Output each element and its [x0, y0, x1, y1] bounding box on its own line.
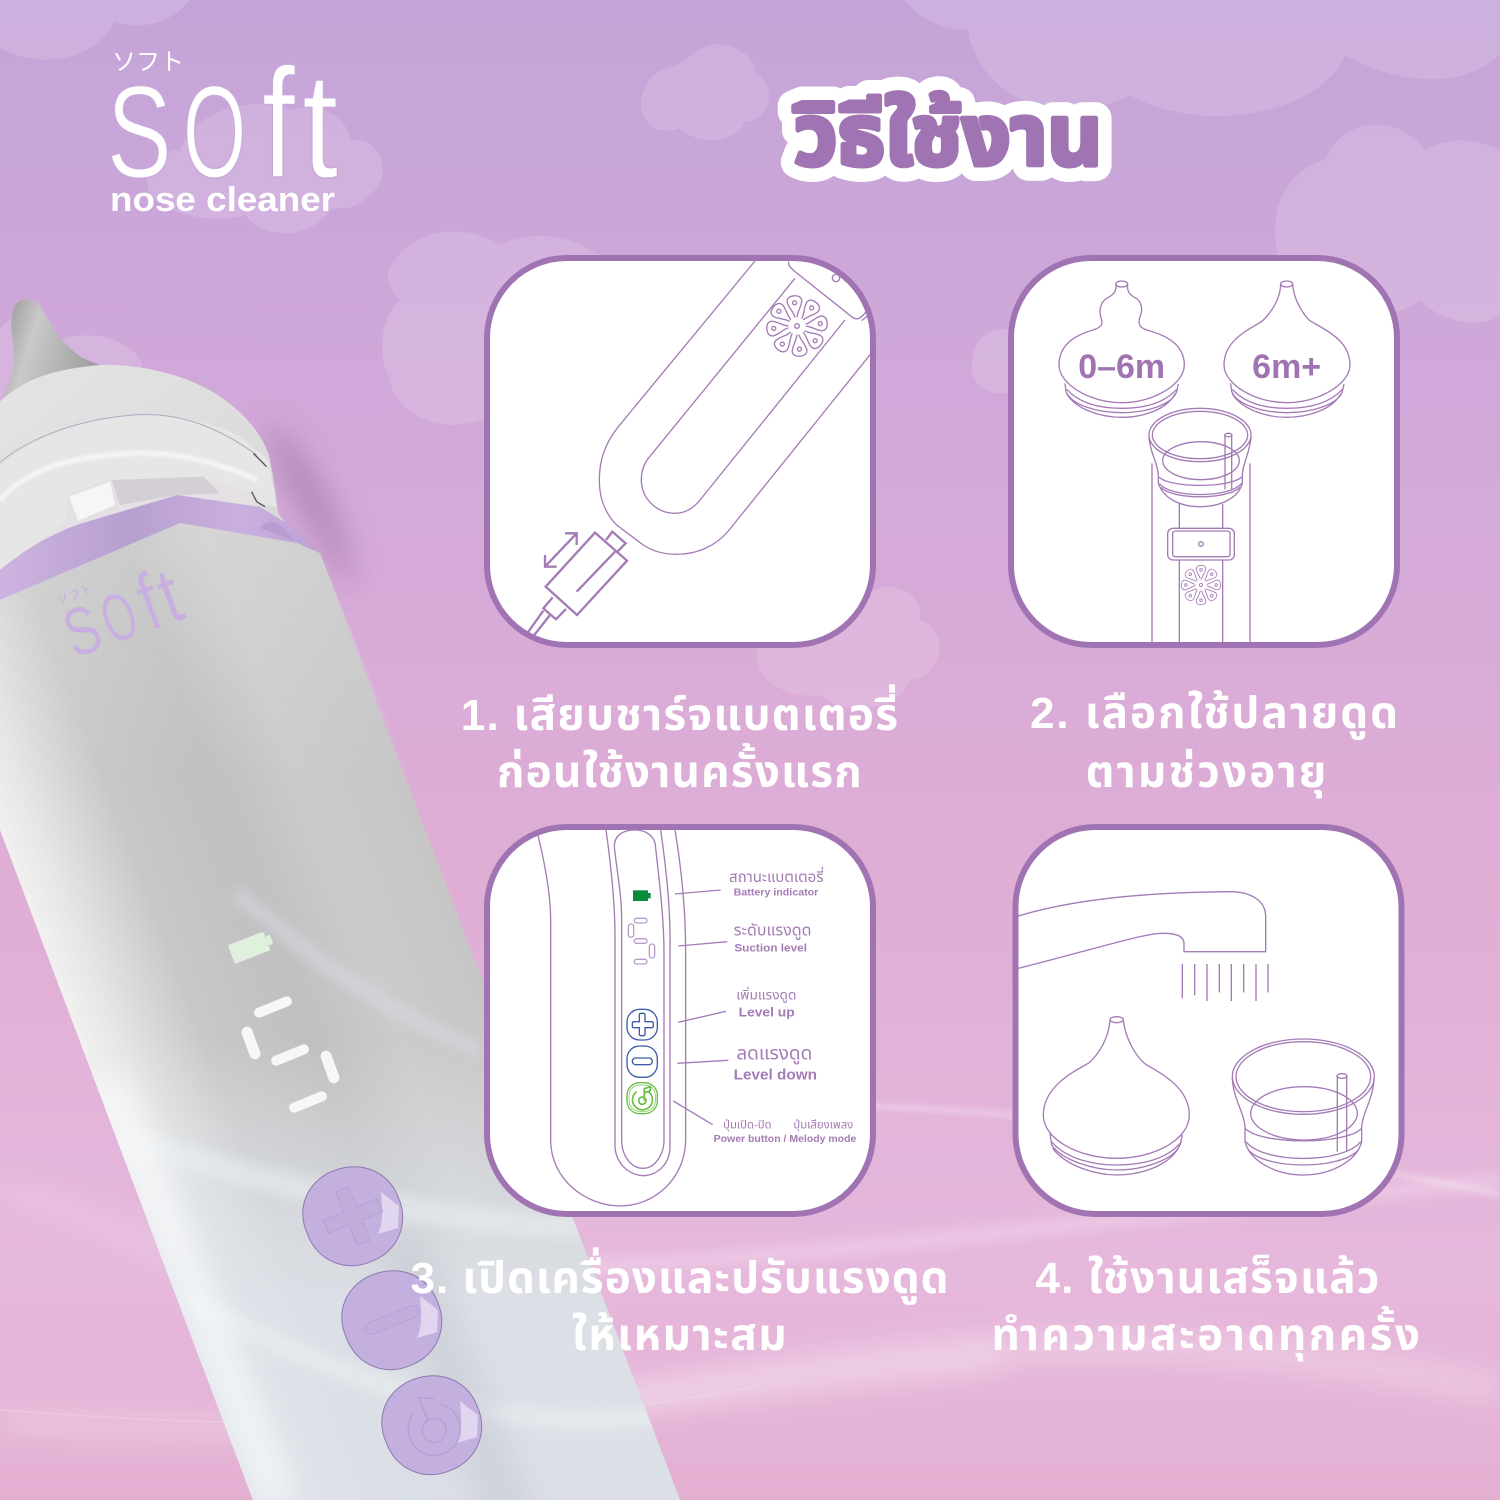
- caption 2: [1030, 689, 1400, 799]
- label level up: เพิ่มแรงดูด: [736, 986, 796, 1004]
- device outlines: [537, 830, 686, 1206]
- logo: [107, 37, 338, 219]
- device body: [0, 523, 680, 1500]
- label level down: [734, 1049, 816, 1080]
- label level up: Level up: [739, 1004, 795, 1019]
- insertion arrow: [545, 533, 577, 567]
- flower emblem: [1181, 565, 1221, 605]
- caption 4: 4. ใช้งานเสร็จแล้ว: [1035, 1254, 1381, 1303]
- panel: step 4 cleaning: [1016, 827, 1402, 1214]
- caption 2: ตามช่วงอายุ: [1086, 748, 1328, 799]
- caption 1: [461, 684, 899, 797]
- label power melody: ปุ่มเสียงเพลง: [793, 1118, 853, 1131]
- caption 4: [991, 1254, 1423, 1362]
- panel: step 1 charging: [487, 258, 873, 645]
- label suction: [734, 923, 810, 952]
- label power melody: [714, 1118, 857, 1145]
- caption 1: 1. เสียบชาร์จแบตเตอรี่: [461, 684, 899, 740]
- device shadow: [262, 420, 358, 590]
- faucet: [1018, 892, 1266, 968]
- flower emblem: [766, 295, 828, 357]
- device collar: [788, 262, 871, 321]
- battery icon: [633, 890, 651, 901]
- label suction: ระดับแรงดูด: [734, 923, 812, 940]
- background clouds: [0, 0, 1500, 709]
- tip 0-6m: [1059, 281, 1184, 417]
- device dome head: [0, 365, 293, 600]
- suction level icon: [628, 918, 655, 964]
- device inner outline: [641, 278, 845, 513]
- power melody button icon: [627, 1083, 657, 1114]
- device body lines: [1152, 463, 1250, 642]
- device logo: t: [146, 552, 193, 640]
- label battery: [729, 866, 824, 899]
- logo wordmark: f: [262, 37, 295, 211]
- caption 3: ให้เหมาะสม: [572, 1311, 788, 1360]
- title: วิธีใช้งาน: [793, 89, 1102, 184]
- base cup: [1232, 1039, 1374, 1175]
- tip 6m+: [1224, 281, 1350, 417]
- water streams: [1182, 964, 1268, 1001]
- device logo: [50, 550, 194, 675]
- background light wisps: [0, 1105, 1500, 1428]
- device logo: ソフト: [54, 579, 95, 609]
- device nipple tip: [0, 300, 100, 397]
- device battery light: [228, 930, 275, 964]
- panel: step 2 tips: [1011, 258, 1397, 645]
- label power melody: Power button / Melody mode: [714, 1134, 857, 1145]
- tip 0-6m: 0–6m: [1078, 348, 1165, 386]
- device logo: O: [91, 577, 148, 660]
- base cup: [1149, 408, 1251, 507]
- logo wordmark: O: [183, 59, 246, 206]
- device body haze: [105, 890, 680, 1500]
- label battery: Battery indicator: [734, 888, 818, 899]
- caption 2: 2. เลือกใช้ปลายดูด: [1030, 689, 1400, 740]
- product: nose cleaner device: [0, 300, 700, 1500]
- caption 3: [410, 1247, 950, 1360]
- device outline: [599, 261, 871, 554]
- logo wordmark: [107, 37, 338, 211]
- caption 1: ก่อนใช้งานครั้งแรก: [497, 743, 863, 797]
- logo wordmark: S: [107, 60, 172, 205]
- device purple collar band: [0, 495, 320, 600]
- device logo: S: [54, 589, 111, 672]
- label level down: Level down: [734, 1067, 817, 1083]
- device plus button: [289, 1151, 419, 1280]
- caption 3: 3. เปิดเครื่องและปรับแรงดูด: [410, 1247, 950, 1305]
- label battery: สถานะแบตเตอรี่: [729, 866, 824, 886]
- label power melody: ปุ่มเปิด-ปิด: [723, 1119, 772, 1132]
- label suction: Suction level: [734, 942, 807, 954]
- charging plug: [526, 532, 627, 638]
- device minus button: [328, 1255, 458, 1384]
- nozzle tip: [1043, 1017, 1189, 1175]
- device logo: f: [126, 557, 173, 648]
- logo tagline: nose cleaner: [110, 181, 335, 219]
- device collar: [1168, 528, 1234, 560]
- device power button: [368, 1360, 498, 1489]
- title: วิธีใช้งาน: [793, 89, 1102, 184]
- plus button icon: [627, 1009, 657, 1040]
- logo wordmark: t: [302, 41, 338, 209]
- leader lines: [673, 890, 728, 1125]
- label level up: [736, 986, 796, 1019]
- device suction level segments: [240, 995, 341, 1114]
- panel: step 3 buttons: [487, 827, 873, 1214]
- logo katakana: ソフト: [112, 42, 184, 77]
- label level down: ลดแรงดูด: [736, 1044, 812, 1066]
- tip 6m+: 6m+: [1252, 348, 1321, 386]
- caption 4: ทำความสะอาดทุกครั้ง: [991, 1306, 1423, 1362]
- minus button icon: [627, 1046, 657, 1077]
